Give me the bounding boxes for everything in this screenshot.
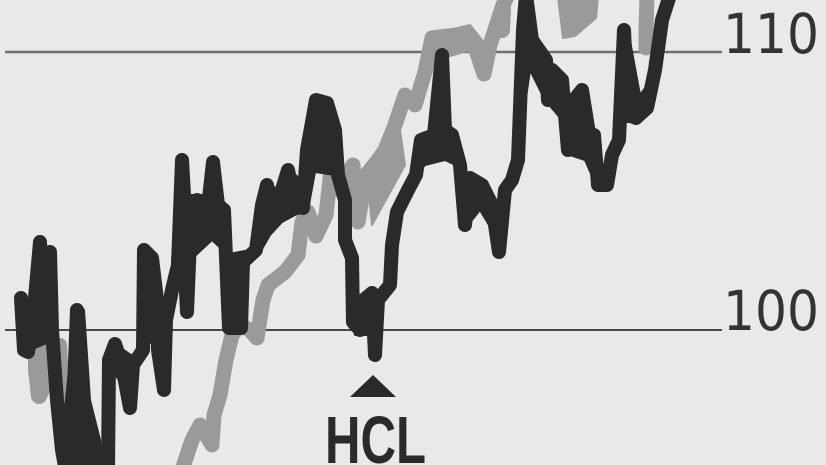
axis label: 100: 100 — [723, 279, 819, 343]
marker: HCL triangle — [350, 375, 396, 397]
axis label: 110: 110 — [723, 2, 819, 66]
series: HCL line (black) — [20, 0, 670, 465]
series: comparison line (grey) — [36, 0, 647, 465]
